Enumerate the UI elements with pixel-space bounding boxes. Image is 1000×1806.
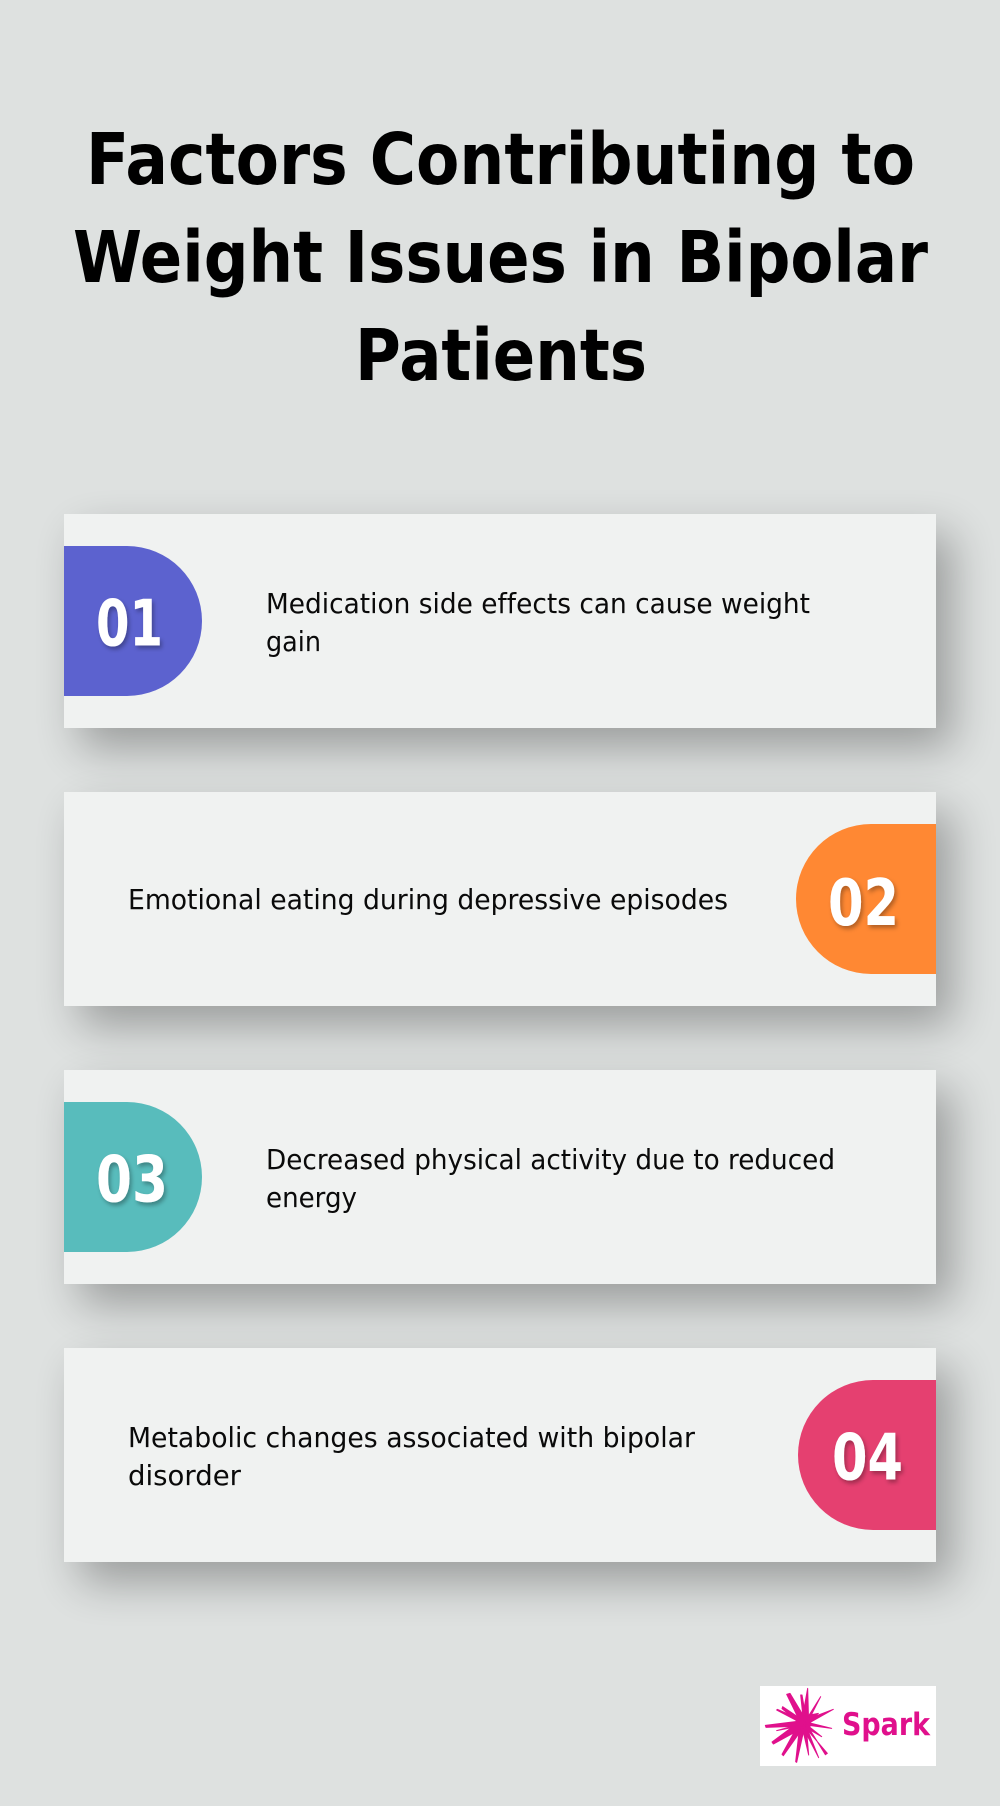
badge 02: 02 xyxy=(828,867,899,941)
badge 02 xyxy=(796,824,936,974)
panel: factor 01 xyxy=(64,514,952,748)
title xyxy=(73,118,929,397)
text: factor 01: gain xyxy=(266,626,321,658)
badge 03: 03 xyxy=(96,1144,168,1218)
text: factor 01: Medication side effects can cause weight xyxy=(266,588,810,620)
text: factor 03: Decreased physical activity due to reduced xyxy=(266,1144,835,1176)
badge 01 xyxy=(64,546,202,696)
text: factor 03: energy xyxy=(266,1182,357,1214)
panel: factor 04 xyxy=(64,1348,952,1582)
text: factor 04: Metabolic changes associated with bipolar xyxy=(128,1422,696,1454)
panel: factor 02 xyxy=(64,792,952,1026)
text: factor 04 xyxy=(128,1422,696,1492)
title: Patients xyxy=(355,314,647,397)
badge 04: 04 xyxy=(832,1422,903,1496)
text: factor 04: disorder xyxy=(128,1460,242,1492)
badge 03 xyxy=(64,1102,202,1252)
text: factor 03 xyxy=(266,1144,835,1214)
text: factor 02: Emotional eating during depressive episodes xyxy=(128,884,728,916)
logo: Spark xyxy=(760,1686,936,1766)
title: Factors Contributing to xyxy=(86,118,915,201)
badge 01: 01 xyxy=(96,588,163,662)
badge 04 xyxy=(798,1380,936,1530)
wordmark: Spark xyxy=(842,1707,931,1743)
icon: spark burst xyxy=(765,1688,833,1762)
text: factor 01 xyxy=(266,588,810,658)
panel: factor 03 xyxy=(64,1070,952,1304)
